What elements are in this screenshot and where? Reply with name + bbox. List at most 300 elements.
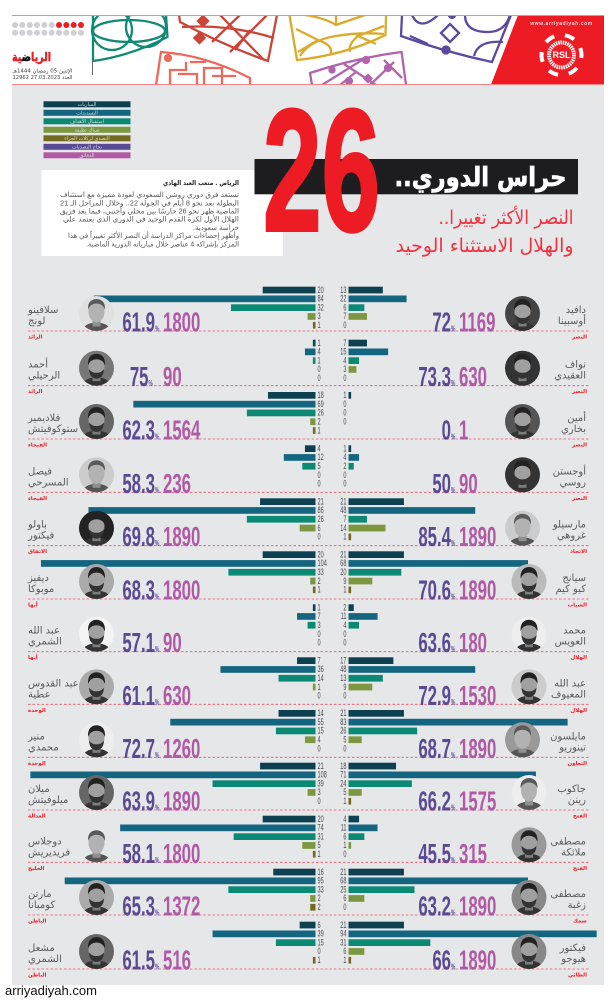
left club: العدالة <box>28 814 46 820</box>
right values: 1 <box>343 840 346 851</box>
players and divider <box>28 827 588 874</box>
right photo <box>505 351 540 397</box>
right values: 83 <box>340 716 346 727</box>
right club: النصر <box>571 442 587 448</box>
red corner <box>491 15 604 84</box>
right values: 1 <box>343 390 346 401</box>
left values: 0 <box>318 628 321 639</box>
right values <box>340 337 346 383</box>
right values: 68 <box>340 875 346 886</box>
left values <box>318 602 321 648</box>
icon: RSL logo: RSL <box>552 50 571 60</box>
right values: 0 <box>343 320 346 330</box>
byline: الرياض . متعب العبد الهادي <box>163 179 239 187</box>
right values: 6 <box>343 946 346 957</box>
left club: الرائد <box>28 334 43 340</box>
left values: 14 <box>318 708 324 719</box>
right stats <box>418 837 487 869</box>
left values: 32 <box>318 302 324 313</box>
right name: روسي <box>560 477 586 488</box>
left photo <box>79 880 114 926</box>
right club: الفتح <box>573 814 587 820</box>
right values <box>340 496 346 542</box>
right photo <box>505 722 540 769</box>
left name: أحمد <box>28 360 48 371</box>
right photo <box>512 617 546 663</box>
left values: 4 <box>318 346 321 357</box>
right values: 7 <box>343 514 346 524</box>
right stats: 1890 <box>459 574 496 606</box>
left stats: % <box>155 593 159 602</box>
right stats <box>432 467 478 499</box>
players and divider <box>28 669 588 716</box>
left stats: 236 <box>163 467 191 499</box>
left name: فريديريش <box>28 847 70 858</box>
left stats: 1372 <box>163 890 200 922</box>
left stats: 75 <box>130 361 149 392</box>
left photo <box>79 617 114 663</box>
right values: 24 <box>340 778 346 789</box>
right name: مصطفى <box>550 889 586 900</box>
players and divider <box>27 296 588 342</box>
left values: 31 <box>318 831 324 842</box>
right bars <box>348 710 568 743</box>
right name: غروهي <box>557 531 586 542</box>
header background <box>12 15 604 85</box>
pattern: purple <box>401 12 511 62</box>
right name: زغبة <box>568 900 586 911</box>
left bars <box>170 710 316 743</box>
left stats: 1800 <box>163 574 200 606</box>
left stats: 68.3 <box>122 574 155 606</box>
right stats: 63.6 <box>418 627 451 658</box>
right stats: % <box>451 593 455 602</box>
left values: 55 <box>318 716 324 727</box>
left values: 36 <box>318 664 324 675</box>
legend: استقبال الأهداف <box>70 118 104 125</box>
right name: العويس <box>555 637 586 648</box>
left stats: 90 <box>163 627 182 658</box>
right values <box>340 866 346 912</box>
left values: 5 <box>318 461 321 471</box>
players and divider <box>27 722 588 769</box>
right club: الطائي <box>568 972 587 978</box>
left values: 0 <box>318 946 321 957</box>
right values: 4 <box>343 355 346 366</box>
right bars <box>348 816 378 849</box>
right values: 11 <box>341 822 346 833</box>
left name: باولو <box>28 520 47 531</box>
left photo <box>79 404 114 450</box>
left values: 1 <box>318 602 321 613</box>
right photo <box>505 296 540 342</box>
title text: حراس الدوري.. <box>394 163 566 193</box>
left values <box>318 919 324 965</box>
left stats: 1564 <box>163 414 200 446</box>
left photo <box>82 830 112 874</box>
left values <box>318 496 324 542</box>
right stats <box>418 785 496 817</box>
right name: مايلسون <box>550 731 586 742</box>
left values: 0 <box>318 373 321 383</box>
left stats: 1800 <box>163 837 200 869</box>
left values <box>318 655 324 701</box>
right values: 48 <box>340 664 346 675</box>
left stats <box>122 785 200 817</box>
left name: فلاديمير <box>28 413 60 424</box>
right stats: 630 <box>459 361 487 392</box>
right values: 21 <box>340 496 346 507</box>
right values: 0 <box>343 849 346 859</box>
right values: 4 <box>343 452 346 463</box>
right bars <box>348 657 475 690</box>
left values: 18 <box>318 390 324 401</box>
right name: عبد الله <box>554 678 586 689</box>
left club: الوحدة <box>28 761 46 767</box>
right photo <box>512 564 546 610</box>
left stats: 63.9 <box>122 785 155 817</box>
right values: 15 <box>340 346 346 357</box>
left stats: 1890 <box>163 785 200 817</box>
intro paragraph <box>60 192 239 248</box>
right values: 94 <box>340 928 346 939</box>
row 11 <box>28 813 588 874</box>
right stats: % <box>451 646 455 655</box>
pattern: red <box>179 15 277 61</box>
left values: 0 <box>318 637 321 648</box>
right name: أوجستن <box>553 466 586 477</box>
left values: 0 <box>318 364 321 375</box>
left name: ميلان <box>28 784 50 795</box>
left values: 0 <box>318 478 321 489</box>
left name: المسرحي <box>28 477 69 488</box>
left values: 6 <box>318 522 321 533</box>
right stats: 1 <box>459 414 468 446</box>
left stats: % <box>155 433 159 442</box>
left values: 39 <box>318 928 324 939</box>
right values <box>343 443 346 489</box>
right stats: 90 <box>459 467 478 499</box>
right values: 0 <box>343 416 346 427</box>
left values: 15 <box>318 937 324 948</box>
right club: الهلال <box>570 655 587 661</box>
left club: الخليج <box>28 866 44 872</box>
pattern: yellow <box>290 15 386 60</box>
players and divider <box>28 351 588 397</box>
left values: 6 <box>318 919 321 930</box>
right values: 1 <box>343 531 346 542</box>
left stats: % <box>155 699 159 707</box>
right values: 0 <box>343 743 346 754</box>
left stats <box>122 837 200 869</box>
right values <box>340 708 346 754</box>
left stats: 69.8 <box>122 521 155 552</box>
left stats: % <box>155 487 159 495</box>
left stats <box>122 627 182 658</box>
legend <box>44 101 130 159</box>
left stats: 62.3 <box>122 414 155 446</box>
left values: 104 <box>318 558 327 569</box>
left values: 1 <box>318 849 321 859</box>
right photo <box>505 457 540 504</box>
row 2 <box>28 337 588 397</box>
right stats: 1169 <box>459 306 495 338</box>
left bars <box>120 816 316 858</box>
right name: المعيوف <box>551 689 586 700</box>
intro text panel <box>42 170 283 256</box>
left name: كومبانا <box>28 900 55 911</box>
left stats: 72.7 <box>122 732 155 764</box>
left stats <box>122 732 200 764</box>
intro paragraph: الهلال الأول لكرة القدم الوحيد في الدوري الذي يعتمد على <box>63 215 239 224</box>
right stats: 1890 <box>459 732 496 764</box>
right values: 5 <box>343 734 346 745</box>
right values: 2 <box>343 602 346 613</box>
left name: سلافينو <box>28 305 58 316</box>
left stats: % <box>155 540 159 549</box>
right stats <box>418 732 496 764</box>
right stats: % <box>451 963 455 972</box>
right values: 1 <box>343 584 346 595</box>
left name: فيصل <box>28 466 52 477</box>
left stats: 57.1 <box>122 627 155 658</box>
subtitle: والهلال الاستثناء الوحيد <box>396 235 574 257</box>
row 7 <box>28 602 588 663</box>
right name: جاكوب <box>557 784 586 795</box>
players and divider <box>27 564 588 610</box>
left stats <box>130 361 182 392</box>
legend: نجاح التصديات <box>72 145 102 151</box>
left club: أبها <box>28 653 38 661</box>
row 8 <box>28 655 588 716</box>
row 1 <box>27 284 588 342</box>
left bars <box>297 604 316 629</box>
right values: 0 <box>343 478 346 489</box>
left club: الباطن <box>28 918 47 924</box>
right stats: 66.2 <box>418 785 451 817</box>
right values: 9 <box>343 681 346 692</box>
left photo <box>79 351 114 397</box>
right stats: 1575 <box>459 785 496 817</box>
right values: 4 <box>343 620 346 630</box>
left values: 1 <box>318 337 321 348</box>
right values: 20 <box>340 567 346 577</box>
left values: 20 <box>318 549 324 560</box>
left values: 39 <box>318 778 324 789</box>
right values <box>340 284 346 330</box>
left values: 14 <box>318 673 324 683</box>
left bars <box>284 445 316 470</box>
row 9 <box>27 708 588 769</box>
left photo <box>79 669 114 716</box>
right values: 13 <box>340 673 346 683</box>
intro paragraph: وأظهر إحصاءات مراكز الدراسة أن النصر الأكثر تغييراً في هذا <box>68 230 239 240</box>
left values: 0 <box>318 531 321 542</box>
right values: 6 <box>343 302 346 313</box>
left stats: 61.9 <box>122 306 155 338</box>
right stats: % <box>451 909 455 918</box>
right values: 3 <box>343 364 346 375</box>
right stats: % <box>451 804 455 813</box>
left values: 26 <box>318 407 324 418</box>
left values <box>318 866 324 912</box>
big number 26: 26 <box>263 74 380 268</box>
left values: 16 <box>318 866 324 877</box>
right name: نواف <box>565 360 586 371</box>
left values: 12 <box>318 452 324 463</box>
issue date: الإثنين 05 رمضان 1444هـ <box>12 68 73 74</box>
left values: 1 <box>318 955 321 965</box>
right stats: % <box>451 699 455 707</box>
right stats: 63.2 <box>418 890 451 922</box>
right club: الاتحاد <box>570 549 587 555</box>
right values: 0 <box>343 637 346 648</box>
right name: رينن <box>568 795 586 806</box>
right values: 25 <box>340 884 346 895</box>
right values: 11 <box>341 611 346 622</box>
right stats: 1890 <box>459 890 496 922</box>
left stats: % <box>155 909 159 918</box>
left bars <box>30 763 315 796</box>
left values: 3 <box>318 311 321 322</box>
left bars <box>213 922 316 964</box>
right photo <box>505 404 540 450</box>
left bars <box>94 287 316 329</box>
right stats: 50 <box>432 467 451 499</box>
left values: 1 <box>318 425 321 436</box>
right values <box>341 602 346 648</box>
right values: 68 <box>340 558 346 569</box>
right bars <box>348 287 407 320</box>
right values: 21 <box>340 708 346 719</box>
right values: 4 <box>343 813 346 824</box>
left club: الوحدة <box>28 708 46 714</box>
right name: سيانج <box>562 573 586 584</box>
left name: الشمري <box>28 637 62 648</box>
right club: الشباب <box>568 602 587 608</box>
row 5 <box>27 496 588 557</box>
left values: 0 <box>318 796 321 806</box>
left values: 95 <box>318 875 324 886</box>
website: www.arriyadiyah.com <box>529 21 593 27</box>
right values: 31 <box>340 937 346 948</box>
left values: 108 <box>318 769 327 780</box>
left values: 20 <box>318 284 324 295</box>
left values: 7 <box>318 611 321 622</box>
right stats: % <box>451 752 455 760</box>
right bars <box>348 445 359 470</box>
left values <box>318 708 324 754</box>
right name: بخاري <box>561 424 586 435</box>
right stats: % <box>451 857 455 865</box>
intro paragraph: الماضية ظهر نحو 26 حارسًا بين محلي وأجنبي، فيما يعد فريق <box>60 206 239 216</box>
intro paragraph: المركز بإشراكه 4 عناصر خلال مبارياته الدورية الماضية. <box>86 240 239 248</box>
right bars <box>348 869 528 902</box>
right values: 48 <box>340 505 346 516</box>
right photo <box>512 827 546 874</box>
row 13 <box>28 919 597 980</box>
row 12 <box>28 866 588 926</box>
players and divider <box>27 404 588 450</box>
left values: 21 <box>318 496 324 507</box>
row 3 <box>27 390 588 450</box>
left bars <box>133 392 316 434</box>
left values: 69 <box>318 398 324 409</box>
right club: الفتح <box>573 866 587 872</box>
players and divider <box>28 457 588 504</box>
left club: الرائد <box>28 389 43 395</box>
left values: 1 <box>318 320 321 330</box>
left values: 3 <box>318 787 321 798</box>
left values: 26 <box>318 514 324 524</box>
right stats: 180 <box>459 627 487 658</box>
left photo <box>79 564 114 610</box>
left values: 1 <box>318 584 321 595</box>
left stats: 61.1 <box>122 679 155 711</box>
left stats <box>122 944 191 976</box>
right club: النصر <box>571 389 587 395</box>
decorative dots <box>12 22 84 36</box>
right values: 21 <box>340 866 346 877</box>
left stats <box>122 414 200 446</box>
right name: تينوريو <box>558 742 586 753</box>
right name: مارسيلو <box>553 520 586 531</box>
right values <box>343 390 346 427</box>
right values: 18 <box>340 760 346 771</box>
left club: أبها <box>28 600 38 608</box>
left bars <box>305 340 316 364</box>
right name: مصطفى <box>550 836 586 847</box>
newspaper logo: الرياضية <box>12 50 51 64</box>
right values: 21 <box>340 549 346 560</box>
left photo <box>79 722 114 769</box>
legend: التسديدات <box>76 111 98 117</box>
right stats <box>432 306 495 338</box>
right stats <box>418 521 496 552</box>
left values <box>318 443 324 489</box>
right bars <box>348 922 597 964</box>
footer website: arriyadiyah.com <box>5 983 97 998</box>
right name: دافيد <box>566 305 586 316</box>
right name: فيكتور <box>560 943 586 954</box>
left values: 84 <box>318 293 324 304</box>
right values: 7 <box>343 337 346 348</box>
right stats: 66 <box>432 944 451 976</box>
left values: 2 <box>318 416 321 427</box>
right values: 71 <box>340 769 346 780</box>
right photo <box>512 880 546 926</box>
right values <box>340 655 346 701</box>
left stats: % <box>155 857 159 865</box>
right photo <box>512 775 546 822</box>
left stats: % <box>148 380 153 389</box>
left stats: 1890 <box>163 521 200 552</box>
left bars <box>88 498 316 531</box>
right values: 5 <box>343 787 346 798</box>
left values: 0 <box>318 690 321 701</box>
left values <box>318 760 327 806</box>
right club: الهلال <box>570 708 587 714</box>
right photo <box>512 934 546 980</box>
right values: 7 <box>343 311 346 322</box>
right stats <box>432 944 496 976</box>
right stats: % <box>451 433 455 442</box>
right values: 26 <box>340 725 346 736</box>
left values: 21 <box>318 760 324 771</box>
right name: هيوجو <box>560 954 586 965</box>
right name: محمد <box>563 626 586 637</box>
right values: 0 <box>343 628 346 639</box>
